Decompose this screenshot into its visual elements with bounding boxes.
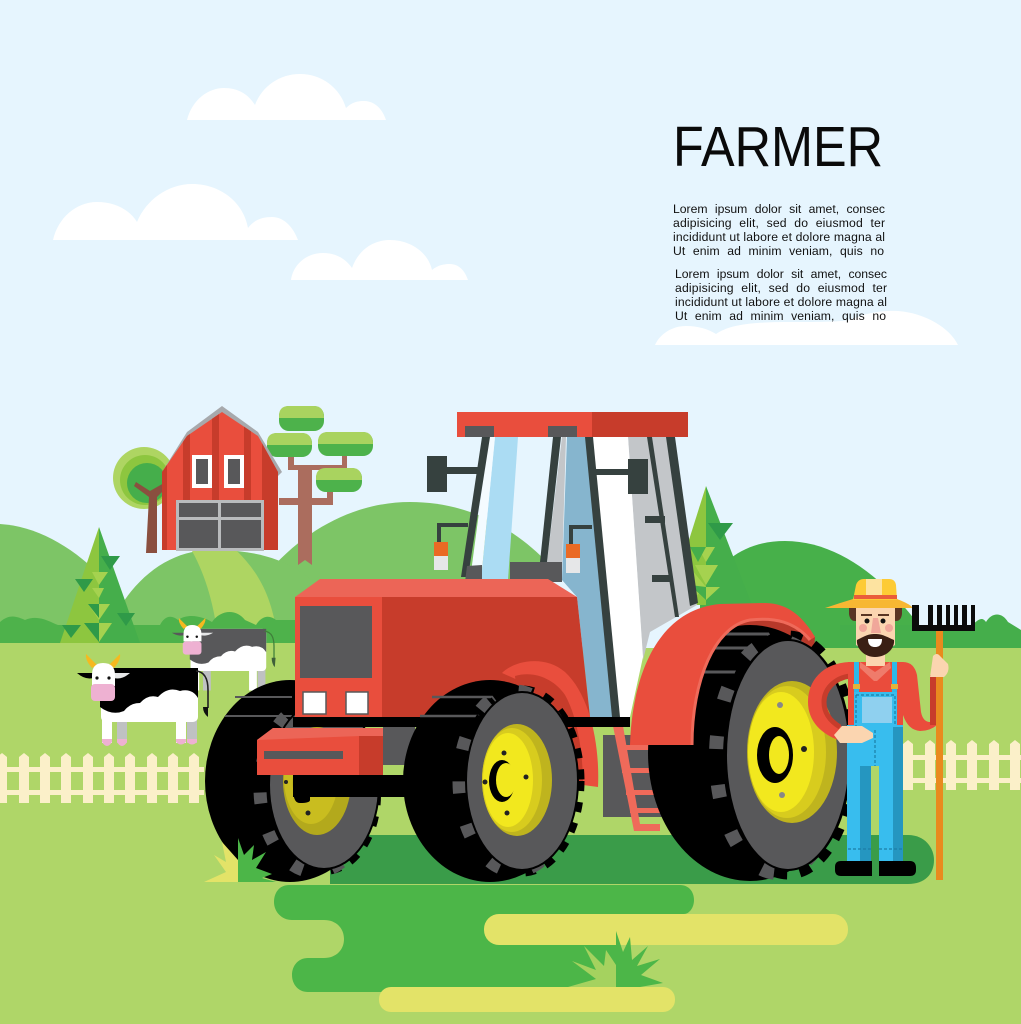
cloud 2: [53, 184, 298, 240]
lamp left: [434, 523, 468, 570]
hill path: [192, 551, 278, 640]
paragraph 1: incididunt ut labore et dolore magna al: [673, 230, 885, 244]
dark green ground shadow: [330, 835, 934, 884]
back left hill: [0, 524, 140, 650]
bush strip left: [0, 612, 300, 645]
axle: [293, 717, 630, 797]
seat: [465, 562, 562, 582]
cab blue glass right: [562, 437, 616, 717]
big centre hill: [270, 502, 545, 650]
middle wheel: [403, 680, 580, 882]
green ground blob: [274, 885, 694, 992]
cab light blue glass: [481, 437, 518, 580]
overalls: [847, 662, 903, 861]
front hill: [100, 550, 330, 650]
paragraph 1: Ut enim ad minim veniam, quis no: [673, 244, 884, 258]
rear fender inner: [690, 613, 815, 680]
tree with pill foliage: [267, 406, 373, 565]
pine tree left: [60, 527, 140, 643]
cab rear grey panels: [628, 437, 697, 660]
right arm: [903, 662, 937, 731]
tractor: [205, 412, 854, 882]
pine tree right: [689, 486, 752, 605]
fence left: [0, 753, 204, 803]
paragraph 2: [675, 267, 887, 323]
farmer: [815, 579, 975, 880]
mirror right: [595, 459, 648, 494]
hand on rake: [930, 654, 948, 677]
boots: [835, 861, 916, 876]
front bumper: [257, 728, 383, 775]
grass tuft bottom: [568, 931, 663, 987]
bush strip right: [840, 614, 1021, 650]
rake: [912, 605, 975, 880]
engine chassis: [383, 727, 415, 765]
cow back: [172, 618, 276, 691]
cloud 3: [291, 240, 468, 280]
paragraph 1: adipisicing elit, sed do eiusmod ter: [673, 216, 885, 230]
barn: [162, 405, 282, 555]
chassis rear and ladder: [603, 726, 667, 831]
paragraph 2: adipisicing elit, sed do eiusmod ter: [675, 281, 887, 295]
rear fender: [630, 603, 815, 745]
front hand: [834, 726, 873, 743]
cloud 4: [655, 311, 958, 345]
title: FARMER: [673, 115, 883, 179]
left arm: [815, 669, 850, 734]
paragraph 2: Lorem ipsum dolor sit amet, consec: [675, 267, 887, 281]
forearm shade: [930, 675, 937, 725]
paragraph 1: Lorem ipsum dolor sit amet, consec: [673, 202, 885, 216]
canopy roof: [457, 412, 688, 437]
lamp right: [566, 525, 592, 573]
yellow path upper: [484, 914, 848, 945]
straw hat: [825, 579, 913, 608]
grass tuft left: [204, 838, 276, 882]
yellow path lower: [379, 987, 675, 1012]
round tree behind barn: [113, 447, 175, 553]
cab white panel: [593, 437, 643, 717]
cab pale glass strip: [470, 437, 495, 580]
front left wheel: [205, 680, 380, 882]
meadow ground: [0, 643, 1021, 1024]
paragraph 2: incididunt ut labore et dolore magna al: [675, 295, 887, 309]
cab posts: [461, 437, 698, 717]
shirt: [848, 662, 903, 732]
right hill: [700, 541, 915, 650]
paragraph 2: Ut enim ad minim veniam, quis no: [675, 309, 886, 323]
left arm shade: [824, 676, 850, 727]
fence right: [903, 740, 1021, 790]
cow front: [77, 654, 208, 746]
cloud 1: [187, 74, 386, 120]
cab grey glass left: [547, 437, 566, 570]
front fender middle wheel: [502, 661, 598, 790]
collar: [860, 650, 891, 681]
hood body: [295, 579, 590, 717]
rear wheel: [648, 625, 854, 881]
mirror left: [427, 456, 478, 492]
head: [849, 608, 902, 657]
axle stub: [293, 775, 310, 803]
paragraph 1: [673, 202, 885, 258]
